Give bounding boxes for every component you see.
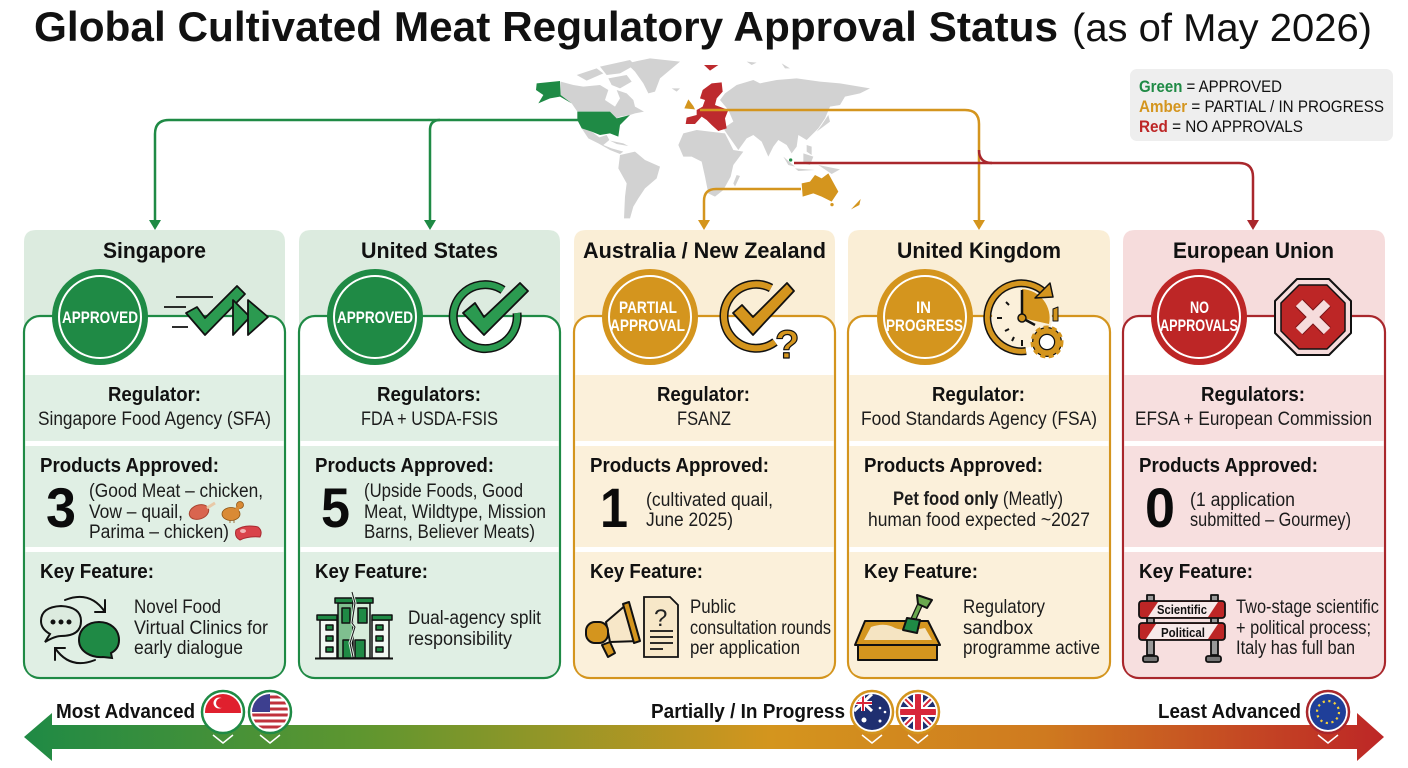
arrow: United States to Singapore and United States panels: [149, 120, 578, 230]
key feature: Key Feature:: [315, 561, 428, 583]
regulators: EFSA + European Commission: [1135, 409, 1372, 430]
icon: two-stage barrier: [1139, 595, 1225, 662]
regulator: [38, 384, 271, 430]
products approved: Parima – chicken): [89, 522, 229, 543]
title: Global Cultivated Meat Regulatory Approval Status: [34, 3, 1058, 50]
legend: Amber = PARTIAL / IN PROGRESS: [1139, 97, 1384, 116]
key feature: Two-stage scientific: [1236, 597, 1379, 618]
pin: United Kingdom flag: [897, 691, 939, 743]
key feature: Public: [690, 597, 736, 618]
icon: chicken drumstick: [187, 502, 215, 522]
status badge: [52, 269, 148, 365]
icon: two-stage barrier: Political: [1161, 626, 1205, 640]
pin: Singapore flag: [202, 691, 244, 743]
key feature: Virtual Clinics for: [134, 618, 269, 639]
products approved: 3: [46, 476, 76, 539]
key feature: responsibility: [408, 629, 512, 650]
icon: check in circle: [453, 283, 528, 349]
label: Partially / In Progress: Partially / In Progress: [651, 701, 845, 723]
products approved: 5: [321, 476, 350, 539]
products approved: Barns, Believer Meats): [364, 522, 535, 543]
products approved: (Good Meat – chicken,: [89, 481, 263, 502]
regulator: Regulator:: [932, 384, 1025, 406]
label: Least Advanced: Least Advanced: [1158, 701, 1301, 723]
key feature: consultation rounds: [690, 618, 831, 639]
products approved: Products Approved:: [315, 455, 494, 477]
key feature: [590, 561, 831, 659]
key feature: early dialogue: [134, 638, 243, 659]
status badge: IN: [916, 298, 931, 317]
key feature: [315, 561, 542, 650]
panel: European Union: [1123, 230, 1385, 678]
products approved: Products Approved:: [864, 455, 1043, 477]
products approved: Products Approved:: [40, 455, 219, 477]
key feature: [40, 561, 269, 659]
icon: fast-track check: [164, 286, 268, 335]
arrow: Australia to Australia / New Zealand panel: [698, 189, 801, 230]
status badge: APPROVED: [62, 308, 138, 327]
icon: sandbox with shovel: [855, 595, 940, 660]
icon: document with question: [644, 597, 678, 657]
products approved: human food expected ~2027: [868, 510, 1090, 531]
heading: United Kingdom: [897, 238, 1061, 263]
products approved: (1 application: [1190, 490, 1295, 511]
status badge: [327, 269, 423, 365]
legend: [1130, 69, 1393, 141]
key feature: [1139, 561, 1379, 659]
key feature: per application: [690, 638, 800, 659]
regulator: FSANZ: [677, 409, 731, 430]
key feature: programme active: [963, 638, 1100, 659]
products approved: [590, 455, 773, 539]
key feature: Key Feature:: [590, 561, 703, 583]
title: (as of May 2026): [1072, 7, 1372, 50]
world map: [536, 58, 870, 218]
status badge: [877, 269, 973, 365]
icon: megaphone: [586, 602, 640, 657]
regulator: Regulator:: [108, 384, 201, 406]
key feature: Dual-agency split: [408, 608, 542, 629]
key feature: + political process;: [1236, 618, 1371, 639]
status badge: APPROVALS: [1160, 316, 1238, 335]
icon: stop sign with cross: [1275, 279, 1351, 355]
United Kingdom, Australia and New Zealand: [684, 99, 861, 209]
products approved: Meat, Wildtype, Mission: [364, 502, 546, 523]
icon: steak: [236, 526, 261, 540]
products approved: [40, 455, 263, 543]
icon: chicken: [222, 502, 244, 523]
icon: two-stage barrier: Scientific: [1157, 603, 1207, 617]
pin: Australia flag: [851, 691, 893, 743]
products approved: [864, 455, 1090, 531]
heading: Australia / New Zealand: [583, 238, 826, 263]
status badge: PARTIAL: [619, 298, 677, 317]
pin: United States flag: [249, 691, 291, 743]
key feature: Key Feature:: [864, 561, 978, 583]
icon: chat bubbles: [41, 597, 119, 663]
products approved: 0: [1145, 476, 1175, 539]
products approved: (cultivated quail,: [646, 490, 773, 511]
progress arrow: [24, 713, 1384, 761]
status badge: [1151, 269, 1247, 365]
icon: clock with gear: [987, 283, 1062, 357]
key feature: Novel Food: [134, 597, 221, 618]
regulators: [1135, 384, 1372, 430]
key feature: Key Feature:: [40, 561, 154, 583]
regulator: Singapore Food Agency (SFA): [38, 409, 271, 430]
icon: document with question: ?: [654, 605, 667, 632]
products approved: June 2025): [646, 510, 733, 531]
products approved: submitted – Gourmey): [1190, 510, 1351, 531]
status badge: APPROVAL: [610, 316, 685, 335]
icon: check with question mark: [724, 283, 799, 367]
pin: European Union flag: [1307, 691, 1349, 743]
heading: Singapore: [103, 238, 206, 263]
heading: European Union: [1173, 238, 1334, 263]
status badge: PROGRESS: [886, 316, 963, 335]
products approved: [315, 455, 546, 543]
status badge: NO: [1190, 298, 1209, 317]
regulators: [361, 384, 498, 430]
regulator: [861, 384, 1097, 430]
products approved: Products Approved:: [590, 455, 769, 477]
products approved: Pet food only (Meatly): [893, 489, 1063, 510]
panel: Australia / New Zealand: [574, 230, 835, 678]
products approved: Products Approved:: [1139, 455, 1318, 477]
panel: Singapore: [24, 230, 285, 678]
legend: Green = APPROVED: [1139, 77, 1282, 96]
key feature: Key Feature:: [1139, 561, 1253, 583]
key feature: Regulatory: [963, 597, 1045, 618]
European Union: [686, 65, 728, 131]
heading: United States: [361, 238, 498, 263]
label: Most Advanced: Most Advanced: [56, 701, 195, 723]
arrow: Europe to United Kingdom panel: [700, 110, 985, 230]
icon: check with question mark: ?: [775, 323, 799, 367]
products approved: [1139, 455, 1351, 539]
key feature: Italy has full ban: [1236, 638, 1355, 659]
products approved: (Upside Foods, Good: [364, 481, 523, 502]
panel: United Kingdom: [848, 230, 1110, 678]
products approved: 1: [600, 476, 628, 539]
key feature: sandbox: [963, 618, 1033, 639]
arrow: map to European Union panel: [794, 150, 1259, 230]
panel: United States: [299, 230, 560, 678]
regulator: [657, 384, 750, 430]
key feature: [864, 561, 1100, 659]
regulators: FDA + USDA-FSIS: [361, 409, 498, 430]
status badge: [602, 269, 698, 365]
status badge: APPROVED: [337, 308, 413, 327]
regulators: Regulators:: [1201, 384, 1305, 406]
regulator: Food Standards Agency (FSA): [861, 409, 1097, 430]
regulator: Regulator:: [657, 384, 750, 406]
icon: split government building: [315, 592, 393, 658]
legend: Red = NO APPROVALS: [1139, 117, 1303, 136]
products approved: Vow – quail,: [89, 502, 183, 523]
Alaska and contiguous United States: [536, 81, 792, 162]
regulators: Regulators:: [377, 384, 481, 406]
